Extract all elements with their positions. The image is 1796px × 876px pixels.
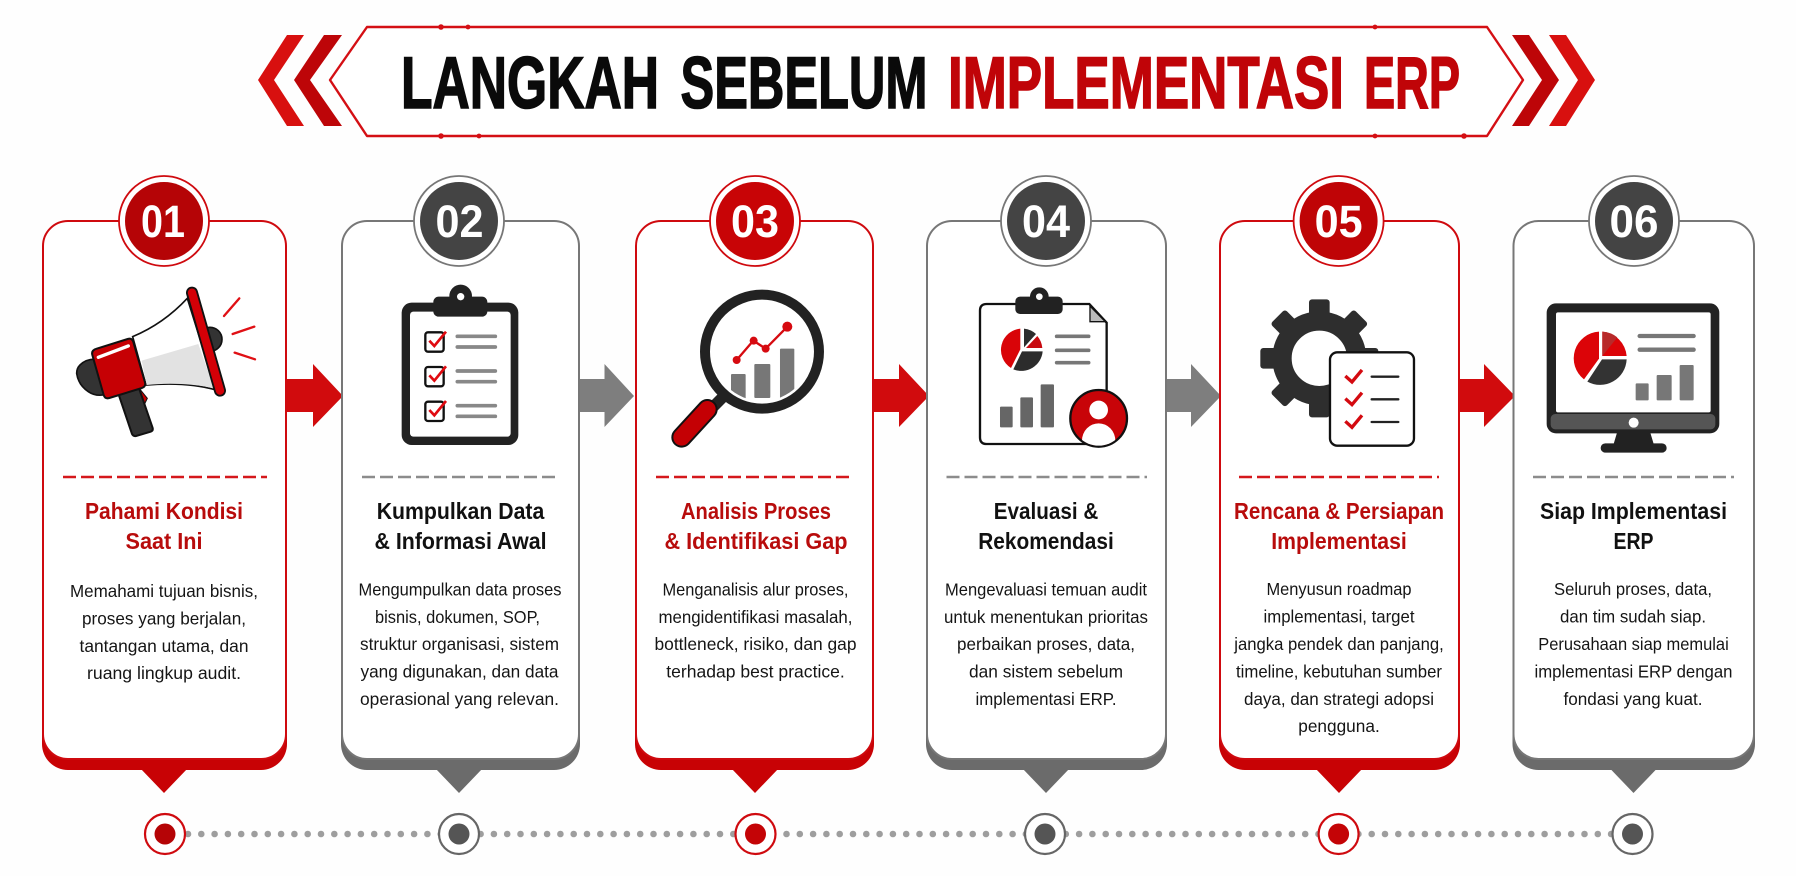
description: jangka pendek dan panjang, — [1233, 634, 1444, 654]
heading: Rencana & Persiapan — [1234, 498, 1444, 524]
number badge 01: 01 — [141, 196, 185, 247]
divider — [656, 476, 854, 478]
icon: megaphone — [77, 293, 255, 436]
number badge 05 — [1294, 176, 1384, 266]
description: Menyusun roadmap — [1266, 579, 1412, 599]
arrow: step 4 to 5 — [1167, 364, 1221, 427]
description: yang digunakan, dan data — [360, 662, 559, 682]
divider — [946, 476, 1147, 478]
number badge 04: 04 — [1022, 196, 1070, 247]
panel: step 03 — [635, 176, 874, 793]
title banner — [258, 24, 1595, 139]
number badge 05: 05 — [1315, 196, 1363, 247]
heading: Evaluasi & — [994, 498, 1098, 524]
heading: Kumpulkan Data — [377, 498, 544, 524]
description: dan sistem sebelum — [969, 662, 1123, 682]
number badge 02: 02 — [436, 196, 484, 247]
panel: step 01 — [42, 176, 287, 793]
divider — [362, 476, 560, 478]
heading: Implementasi — [1271, 528, 1407, 554]
heading: & Identifikasi Gap — [664, 528, 848, 554]
divider — [63, 476, 267, 478]
timeline node 2 — [439, 814, 479, 854]
number badge 04 — [1001, 176, 1091, 266]
icon: monitor dashboard — [1547, 303, 1719, 453]
description: daya, dan strategi adopsi — [1244, 689, 1434, 709]
panel: step 02 — [341, 176, 580, 793]
timeline node 4 — [1025, 814, 1065, 854]
timeline — [145, 814, 1652, 854]
description: implementasi ERP dengan — [1534, 662, 1732, 682]
number badge 02 — [414, 176, 504, 266]
number badge 01 — [119, 176, 209, 266]
timeline node 3 — [736, 814, 776, 854]
description: bottleneck, risiko, dan gap — [654, 634, 856, 654]
panel: step 05 — [1219, 176, 1460, 793]
heading — [85, 498, 243, 554]
number badge 03: 03 — [731, 196, 779, 247]
description: implementasi ERP. — [976, 689, 1116, 709]
description: untuk menentukan prioritas — [944, 607, 1148, 627]
description: tantangan utama, dan — [80, 636, 248, 656]
description: operasional yang relevan. — [360, 689, 559, 709]
number badge 06: 06 — [1610, 196, 1658, 247]
description: fondasi yang kuat. — [1564, 689, 1702, 709]
description — [654, 580, 856, 682]
title text — [401, 43, 1460, 124]
heading — [1540, 498, 1727, 554]
title text: ERP — [1364, 43, 1460, 124]
description: proses yang berjalan, — [82, 608, 246, 628]
description — [1534, 579, 1732, 709]
divider — [1533, 476, 1734, 478]
heading — [1234, 498, 1444, 554]
right chevrons — [1512, 35, 1595, 126]
timeline node 1 — [145, 814, 185, 854]
description: Mengevaluasi temuan audit — [945, 580, 1147, 600]
description: Memahami tujuan bisnis, — [70, 581, 258, 601]
description — [944, 580, 1148, 709]
icon: magnifier with chart — [682, 295, 819, 437]
description — [70, 581, 258, 683]
divider — [1239, 476, 1439, 478]
arrow: step 5 to 6 — [1460, 364, 1515, 427]
banner frame — [330, 24, 1523, 139]
icon: report with user — [980, 287, 1127, 458]
icon: clipboard checklist — [402, 285, 518, 445]
heading: & Informasi Awal — [374, 528, 546, 554]
heading: Rekomendasi — [978, 528, 1114, 554]
timeline node 5 — [1319, 814, 1359, 854]
heading — [978, 498, 1114, 554]
heading: ERP — [1614, 528, 1654, 554]
description: perbaikan proses, data, — [957, 634, 1135, 654]
title text: SEBELUM — [680, 43, 928, 124]
description: Seluruh proses, data, — [1554, 579, 1712, 599]
left chevrons — [258, 35, 342, 126]
heading: Saat Ini — [126, 528, 202, 554]
arrow: step 3 to 4 — [874, 364, 929, 427]
description: bisnis, dokumen, SOP, — [375, 607, 540, 627]
description: timeline, kebutuhan sumber — [1236, 662, 1442, 682]
heading — [664, 498, 848, 554]
panel: step 06 — [1512, 176, 1755, 793]
icon: gear with checklist — [1260, 299, 1414, 446]
description: implementasi, target — [1264, 606, 1415, 626]
description — [358, 580, 562, 709]
heading: Siap Implementasi — [1540, 498, 1727, 524]
description: dan tim sudah siap. — [1560, 606, 1706, 626]
description — [1233, 579, 1444, 736]
description: mengidentifikasi masalah, — [658, 607, 852, 627]
description: Mengumpulkan data proses — [358, 580, 562, 600]
heading — [374, 498, 546, 554]
title text: LANGKAH — [401, 43, 659, 124]
arrow: step 1 to 2 — [287, 364, 343, 427]
title text: IMPLEMENTASI — [948, 43, 1344, 124]
panel: step 04 — [926, 176, 1167, 793]
description: Menganalisis alur proses, — [662, 580, 848, 600]
number badge 03 — [710, 176, 800, 266]
arrow: step 2 to 3 — [580, 364, 634, 427]
description: ruang lingkup audit. — [87, 663, 241, 683]
description: terhadap best practice. — [666, 662, 845, 682]
description: struktur organisasi, sistem — [360, 634, 559, 654]
heading: Pahami Kondisi — [85, 498, 243, 524]
timeline node 6 — [1612, 814, 1652, 854]
description: pengguna. — [1298, 716, 1380, 736]
description: Perusahaan siap memulai — [1538, 634, 1729, 654]
number badge 06 — [1589, 176, 1679, 266]
heading: Analisis Proses — [681, 498, 831, 524]
